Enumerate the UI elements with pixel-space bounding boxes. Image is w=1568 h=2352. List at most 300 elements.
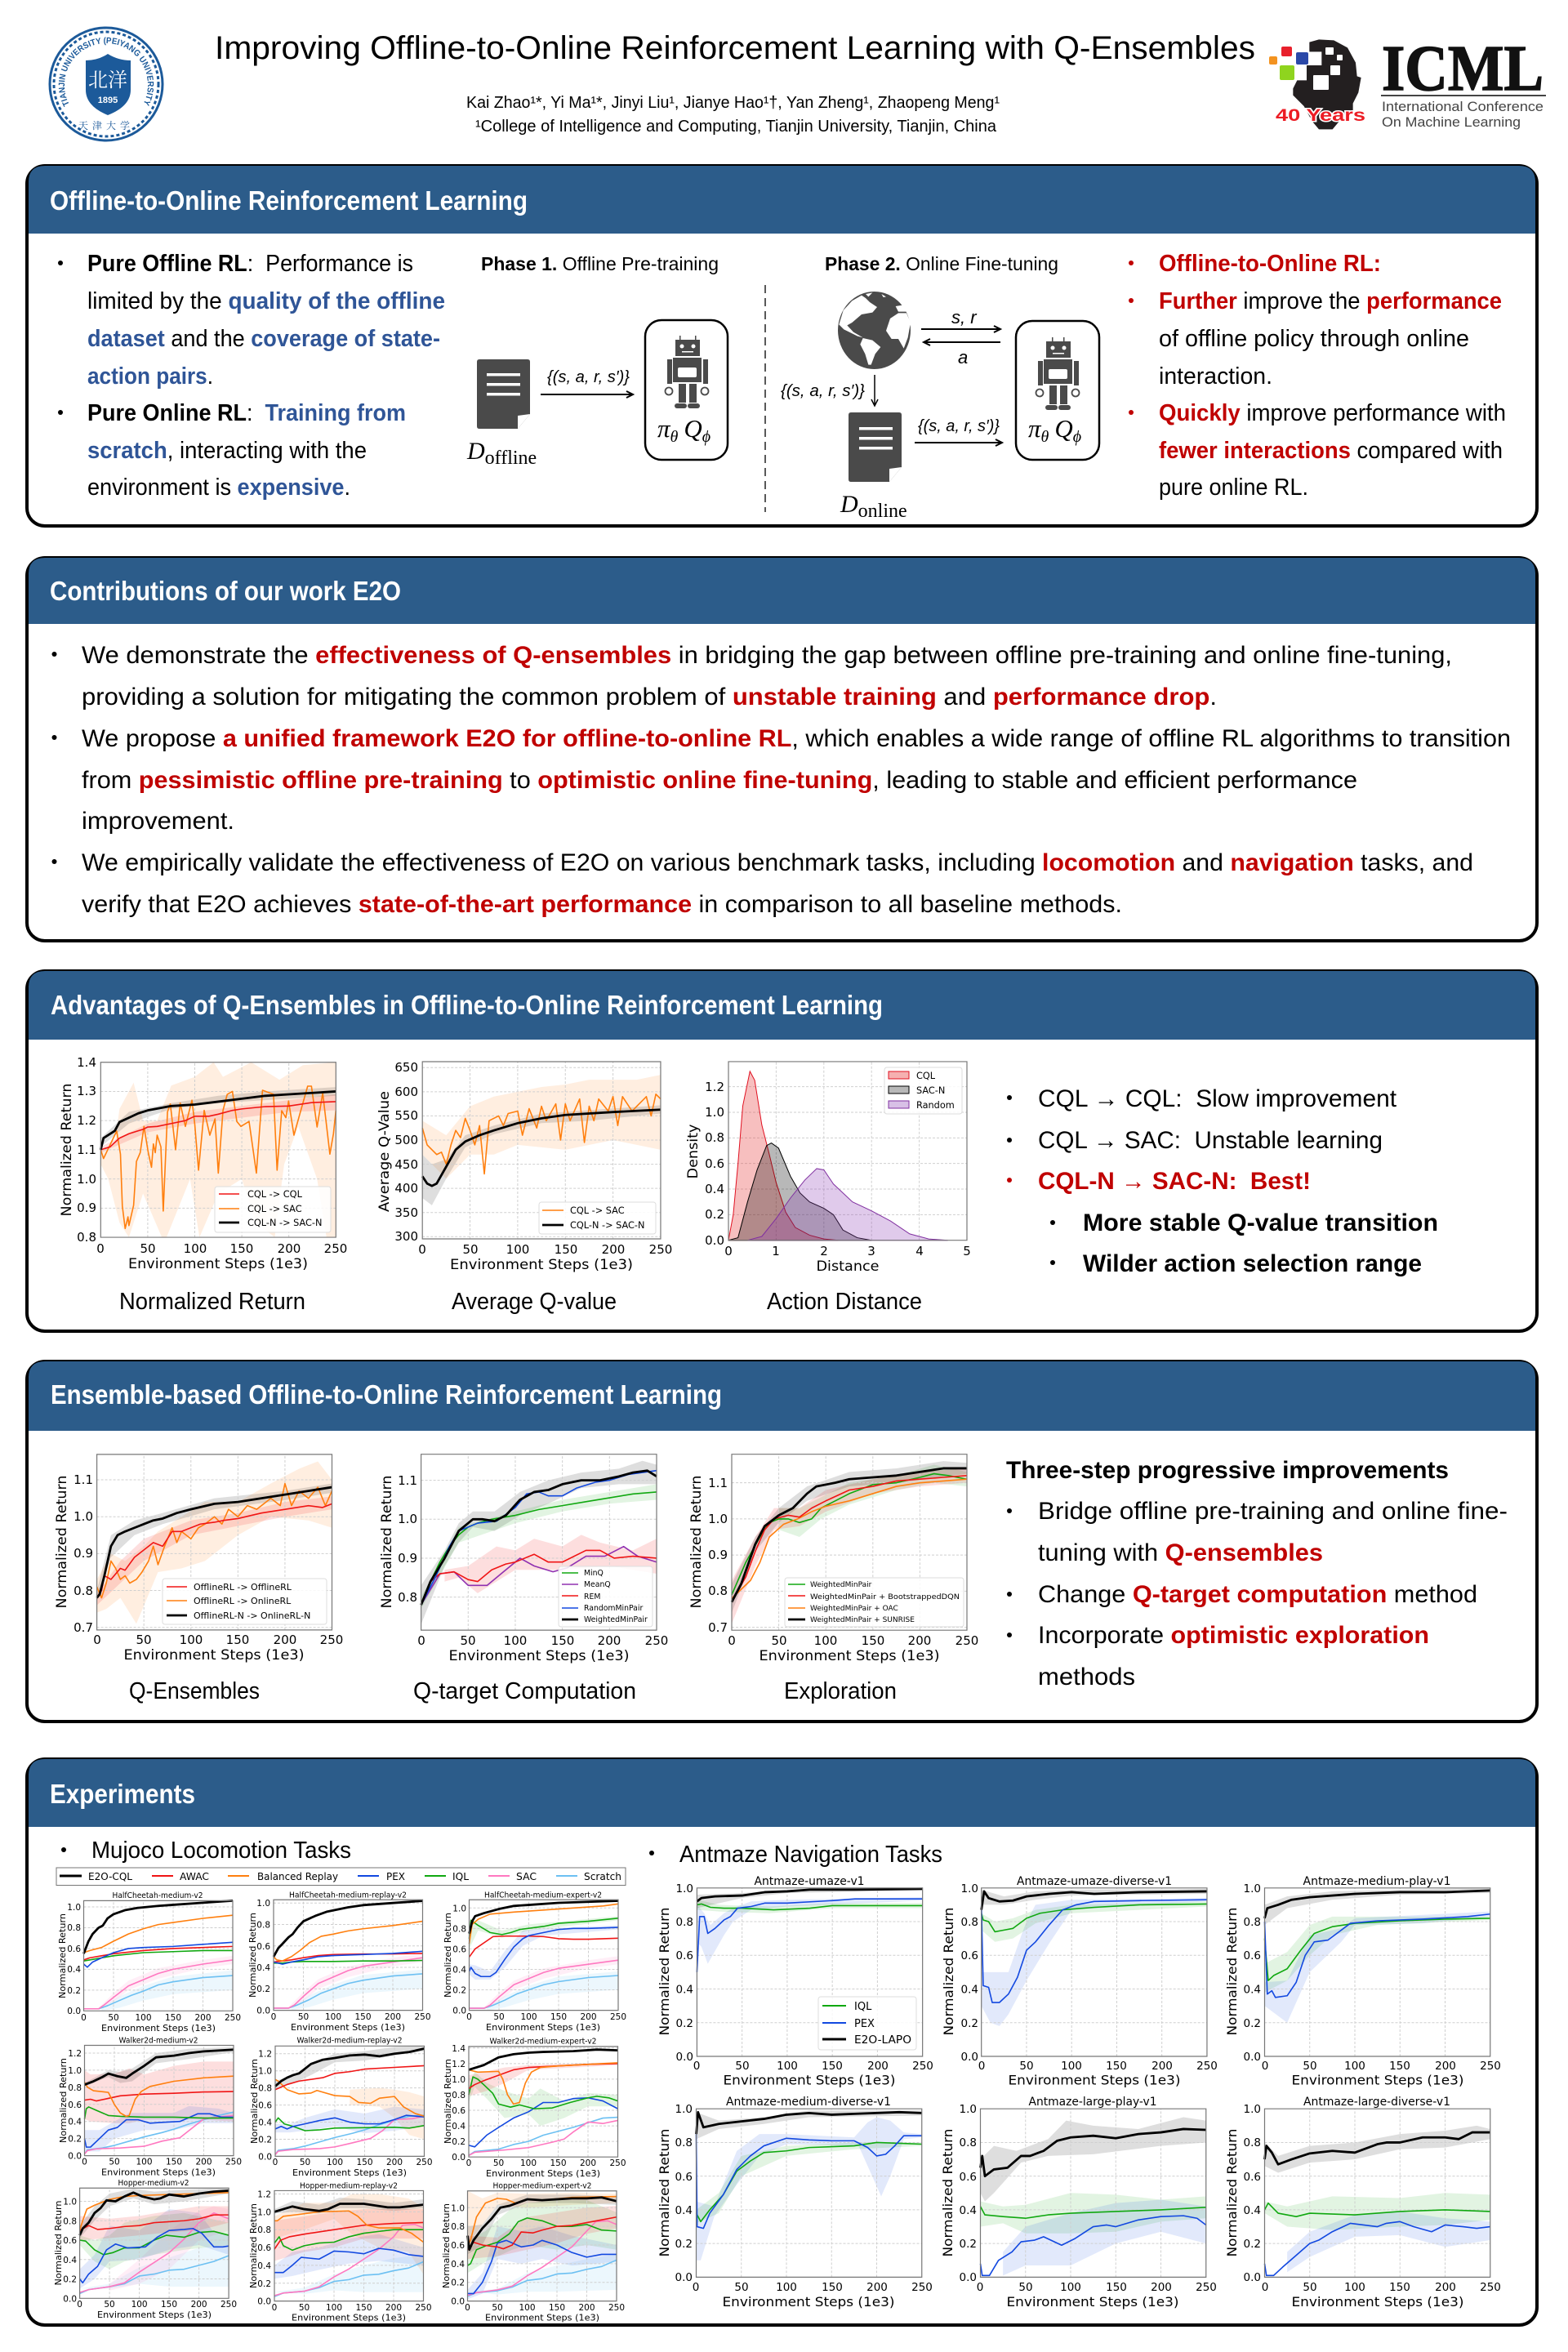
chart: Antmaze-umaze-diverse-v1: 150 [1106, 2060, 1127, 2073]
panel: experiments [27, 1759, 1537, 2325]
chart: Antmaze-medium-diverse-v1: 250 [911, 2281, 933, 2294]
chart: Walker2d-medium-replay-v2: 200 [386, 2158, 403, 2167]
chart: average Q-value: 100 [506, 1242, 529, 1257]
chart: Hopper-medium-replay-v2: 1.2 [257, 2190, 271, 2200]
diagram: phase 2 online fine-tuning [781, 253, 1099, 522]
chart: Hopper-medium-replay-v2: 0.0 [257, 2297, 271, 2307]
chart: action distance: 0.2 [705, 1207, 724, 1222]
chart: normalized return: 250 [324, 1241, 347, 1256]
icon: robot agent: θ [1041, 428, 1049, 446]
chart: Antmaze-umaze-diverse-v1: 0.8 [961, 1916, 978, 1929]
chart: Antmaze-medium-play-v1: 150 [1389, 2060, 1410, 2073]
chart: action distance: 4 [915, 1244, 924, 1258]
chart: Walker2d-medium-expert-v2: 0.2 [452, 2137, 466, 2147]
chart: Antmaze-umaze-v1: 50 [735, 2060, 750, 2073]
chart: HalfCheetah-medium-replay-v2 [247, 1891, 431, 2033]
chart: normalized return: 150 [230, 1241, 253, 1256]
chart: Antmaze-large-diverse-v1: 250 [1480, 2281, 1501, 2294]
icon: robot agent [645, 320, 728, 460]
chart: Q-ensembles: 50 [136, 1633, 152, 1647]
chart: Antmaze-umaze-v1: 250 [912, 2060, 933, 2073]
chart: HalfCheetah-medium-expert-v2 [443, 1891, 626, 2033]
chart: exploration: Normalized Return [688, 1475, 705, 1609]
heading [29, 1361, 1535, 1431]
chart: Antmaze-medium-play-v1: 0.2 [1244, 2017, 1261, 2030]
chart: Antmaze-large-play-v1: 0 [977, 2281, 983, 2294]
chart: exploration: 250 [956, 1633, 978, 1648]
chart: average Q-value: 500 [394, 1133, 418, 1147]
icon: robot agent: Q [684, 414, 702, 443]
chart: HalfCheetah-medium-replay-v2: 250 [414, 2012, 431, 2022]
chart: HalfCheetah-medium-v2: 0.8 [67, 1923, 81, 1933]
legend: Mujoco charts: E2O-CQL [88, 1871, 132, 1882]
chart: Antmaze-medium-play-v1: 0.8 [1244, 1916, 1261, 1929]
text block: contributions list: from pessimistic offline pre-training to optimistic online fine-tuning , leading to stable and efficient performance [82, 767, 1357, 794]
chart: Walker2d-medium-v2 [58, 2037, 242, 2177]
chart: Hopper-medium-expert-v2: 50 [492, 2303, 503, 2313]
chart: Hopper-medium-v2: 0.8 [63, 2216, 77, 2226]
text block: three-step improvements [1006, 1457, 1508, 1690]
logo: Tianjin University seal: 1895 [98, 96, 118, 105]
chart: Antmaze-large-diverse-v1: 200 [1435, 2281, 1456, 2294]
chart legend [163, 1579, 327, 1624]
subheading: Mujoco locomotion tasks: Mujoco Locomotion Tasks [91, 1838, 351, 1864]
chart: Hopper-medium-expert-v2: 0.6 [451, 2241, 465, 2251]
chart legend: WeightedMinPair + BootstrappedDQN [810, 1593, 960, 1601]
chart: exploration: 150 [862, 1633, 884, 1648]
chart: Walker2d-medium-expert-v2: Normalized Return [443, 2059, 453, 2144]
chart: Q-ensembles: 0 [93, 1633, 101, 1647]
text block: three-step improvements: Three-step progressive improvements [1006, 1457, 1449, 1484]
chart: Hopper-medium-expert-v2: 0 [465, 2303, 470, 2313]
chart: Hopper-medium-replay-v2: Hopper-medium-replay-v2 [300, 2182, 398, 2190]
chart: Walker2d-medium-v2: 0.8 [68, 2083, 82, 2093]
panel: offline-to-online RL [27, 166, 1537, 526]
chart: HalfCheetah-medium-expert-v2: 250 [610, 2012, 626, 2022]
chart: normalized return: 1.0 [77, 1172, 96, 1187]
chart: Hopper-medium-replay-v2: 1.0 [257, 2207, 271, 2217]
chart: HalfCheetah-medium-replay-v2: 150 [354, 2012, 372, 2022]
chart: Walker2d-medium-v2: 100 [136, 2158, 153, 2167]
chart: Antmaze-large-diverse-v1: 0.0 [1244, 2271, 1261, 2284]
icon: robot agent: θ [670, 428, 679, 446]
chart: HalfCheetah-medium-v2: 1.0 [67, 1903, 81, 1913]
chart: Antmaze-large-play-v1: Environment Steps (1e3) [1006, 2294, 1179, 2310]
chart: Walker2d-medium-expert-v2 [443, 2037, 626, 2179]
chart: Antmaze-umaze-diverse-v1: 200 [1152, 2060, 1173, 2073]
chart: Hopper-medium-expert-v2: 250 [608, 2303, 625, 2313]
chart: Q-target computation: 0.9 [398, 1551, 417, 1566]
chart: HalfCheetah-medium-expert-v2: 1.0 [452, 1904, 466, 1913]
legend: Mujoco charts: SAC [516, 1871, 537, 1882]
chart: HalfCheetah-medium-v2: 50 [108, 2013, 119, 2023]
chart: Antmaze-umaze-diverse-v1: 50 [1019, 2060, 1034, 2073]
chart: Antmaze-large-play-v1: 1.0 [960, 2103, 977, 2116]
chart: HalfCheetah-medium-expert-v2: 0.8 [452, 1924, 466, 1934]
chart: Antmaze-large-play-v1: Antmaze-large-play-v1 [1029, 2096, 1156, 2109]
logo: ICML 40 years: 40 Years [1276, 106, 1365, 125]
chart: HalfCheetah-medium-expert-v2: 0.6 [452, 1944, 466, 1954]
chart: average Q-value: 150 [555, 1242, 577, 1257]
subheading: Antmaze navigation tasks: Antmaze Navigation Tasks [679, 1842, 942, 1868]
text block: offline-to-online RL benefits [1129, 251, 1506, 501]
chart: normalized return: Environment Steps (1e3) [128, 1256, 308, 1272]
chart: Antmaze-large-play-v1: 0.4 [960, 2204, 977, 2217]
chart: Q-target computation [379, 1454, 668, 1664]
chart: normalized return: 200 [278, 1241, 301, 1256]
chart: Hopper-medium-replay-v2: Environment Steps (1e3) [292, 2313, 406, 2323]
chart: Hopper-medium-expert-v2: Hopper-medium-expert-v2 [493, 2182, 591, 2190]
chart: Antmaze-umaze-v1: 1.0 [676, 1882, 693, 1895]
chart: normalized return: 0.9 [77, 1200, 96, 1215]
text block: algorithm comparison: More stable Q-value transition [1083, 1209, 1438, 1236]
chart: Hopper-medium-replay-v2: 100 [326, 2303, 342, 2313]
chart: Antmaze-medium-diverse-v1: 0.2 [675, 2238, 693, 2251]
chart: HalfCheetah-medium-v2: 100 [135, 2013, 152, 2023]
chart: normalized return: 1.2 [77, 1113, 96, 1128]
text block: algorithm comparison: Wilder action selection range [1083, 1250, 1422, 1277]
chart: Antmaze-medium-play-v1: 0.0 [1244, 2051, 1261, 2064]
chart: action distance: Distance [817, 1258, 879, 1275]
chart: Hopper-medium-v2: 0.2 [63, 2275, 77, 2285]
chart: Antmaze-medium-play-v1: 50 [1303, 2060, 1317, 2073]
chart: Q-ensembles: 100 [180, 1633, 203, 1647]
chart: Walker2d-medium-replay-v2: Environment Steps (1e3) [292, 2167, 407, 2178]
chart: Antmaze-medium-play-v1: 250 [1480, 2060, 1501, 2073]
chart: Hopper-medium-v2: Normalized Return [53, 2200, 64, 2285]
diagram: phase 2 online fine-tuning: a [958, 347, 968, 368]
chart legend: PEX [854, 2018, 875, 2030]
chart: Walker2d-medium-expert-v2: 0.8 [452, 2091, 466, 2100]
chart: Hopper-medium-v2: 0 [77, 2300, 82, 2310]
chart: Antmaze-medium-diverse-v1: 0.4 [675, 2204, 693, 2217]
diagram: phase 2 online fine-tuning: {(s, a, r, s′)} [918, 417, 1000, 435]
text block: offline and online RL: scratch, interacting with the [87, 438, 367, 464]
chart: action distance: 1.2 [705, 1080, 724, 1094]
chart legend: OfflineRL -> OnlineRL [194, 1596, 292, 1606]
heading [29, 1759, 1535, 1827]
chart: Antmaze-medium-diverse-v1 [657, 2096, 933, 2310]
chart: Antmaze-umaze-v1: Normalized Return [657, 1908, 672, 2035]
icon: offline dataset document [477, 359, 530, 429]
chart: Antmaze-medium-play-v1: 200 [1435, 2060, 1456, 2073]
chart: Walker2d-medium-replay-v2: 50 [300, 2158, 310, 2167]
chart: Antmaze-umaze-diverse-v1: 0.0 [961, 2051, 978, 2064]
chart: Hopper-medium-expert-v2: 100 [519, 2303, 536, 2313]
chart legend: CQL-N -> SAC-N [247, 1218, 322, 1228]
heading: Offline-to-Online Reinforcement Learning [50, 185, 528, 216]
chart: Q-ensembles: 1.0 [74, 1509, 93, 1524]
text block: offline and online RL: limited by the quality of the offline [87, 288, 445, 314]
text block: algorithm comparison: CQL → CQL: Slow improvement [1038, 1085, 1397, 1112]
chart: Antmaze-large-diverse-v1: 0.6 [1244, 2171, 1261, 2184]
chart: Antmaze-umaze-diverse-v1: Normalized Return [941, 1908, 956, 2035]
text block: offline-to-online RL benefits: Quickly improve performance with [1159, 400, 1506, 426]
chart: Antmaze-medium-diverse-v1: 1.0 [675, 2103, 693, 2116]
chart legend: SAC-N [916, 1085, 945, 1096]
chart: HalfCheetah-medium-v2: 150 [165, 2013, 181, 2023]
logo: Tianjin University seal [49, 26, 163, 142]
text block: contributions list: improvement. [82, 808, 234, 835]
text block: offline-to-online RL benefits: Further improve the performance [1159, 288, 1502, 314]
chart: Antmaze-large-diverse-v1: Antmaze-large-diverse-v1 [1303, 2096, 1450, 2109]
legend: Mujoco charts: Scratch [584, 1871, 621, 1882]
chart: HalfCheetah-medium-v2: 0 [81, 2013, 87, 2023]
chart: HalfCheetah-medium-replay-v2: 0 [271, 2012, 276, 2022]
chart: exploration: 0.9 [708, 1548, 728, 1562]
chart: Antmaze-large-play-v1: 250 [1196, 2281, 1217, 2294]
chart legend: OfflineRL -> OfflineRL [194, 1582, 292, 1592]
chart: HalfCheetah-medium-replay-v2: 0.2 [256, 1984, 270, 1994]
diagram: phase 2 online fine-tuning: s, r [951, 307, 978, 327]
chart: exploration: 1.0 [708, 1512, 728, 1526]
chart: exploration: 200 [908, 1633, 931, 1648]
chart: HalfCheetah-medium-v2: 0.2 [67, 1986, 81, 1996]
chart: Walker2d-medium-expert-v2: 0.0 [452, 2153, 466, 2163]
chart: HalfCheetah-medium-replay-v2: 0.0 [256, 2007, 270, 2016]
chart: normalized return: 1.1 [77, 1143, 96, 1157]
chart: Antmaze-medium-play-v1: 0 [1262, 2060, 1268, 2073]
chart: Antmaze-umaze-v1: Environment Steps (1e3) [724, 2073, 895, 2087]
chart: Q-ensembles [54, 1454, 343, 1664]
chart: Antmaze-medium-diverse-v1: 50 [734, 2281, 749, 2294]
chart: Walker2d-medium-v2: Environment Steps (1e3) [101, 2167, 216, 2177]
heading: Advantages of Q-Ensembles in Offline-to-Online Reinforcement Learning [51, 990, 883, 1020]
diagram: phase 1 offline pre-training: Phase 1. Offline Pre-training [481, 253, 719, 274]
chart: Q-ensembles: 0.8 [74, 1584, 93, 1598]
chart: Hopper-medium-expert-v2: 1.0 [451, 2203, 465, 2213]
chart: HalfCheetah-medium-expert-v2: Environment Steps (1e3) [486, 2022, 600, 2033]
text block: offline and online RL: action pairs. [87, 363, 213, 390]
chart: Walker2d-medium-replay-v2: 0.6 [258, 2101, 272, 2111]
chart: Walker2d-medium-expert-v2: 50 [493, 2158, 504, 2168]
chart: Antmaze-large-diverse-v1: 100 [1344, 2281, 1365, 2294]
chart: Hopper-medium-expert-v2: 0.8 [451, 2222, 465, 2232]
caption: action distance: Action Distance [767, 1289, 922, 1315]
chart: action distance: 1.0 [705, 1105, 724, 1120]
chart legend: CQL -> SAC [570, 1205, 625, 1216]
chart: Walker2d-medium-replay-v2: 1.2 [258, 2050, 272, 2060]
chart: Antmaze-large-play-v1: 0.0 [960, 2271, 977, 2284]
chart: average Q-value: 550 [394, 1108, 418, 1123]
chart legend: WeightedMinPair [584, 1615, 648, 1624]
chart: Walker2d-medium-expert-v2: 200 [580, 2158, 596, 2168]
text block: offline and online RL: environment is expensive. [87, 474, 350, 501]
chart: Q-target computation: 100 [504, 1633, 527, 1648]
chart: average Q-value [376, 1060, 672, 1273]
text block: offline and online RL: Pure Online RL: Training from [87, 400, 406, 426]
chart: HalfCheetah-medium-expert-v2: Normalized Return [443, 1913, 453, 1998]
chart: normalized return: 1.3 [77, 1084, 96, 1098]
chart: Walker2d-medium-v2: 1.0 [68, 2066, 82, 2076]
logo: Tianjin University seal: 天津大学 [78, 119, 134, 131]
chart: action distance: 0 [724, 1244, 733, 1258]
title: Improving Offline-to-Online Reinforcement Learning with Q-Ensembles [215, 30, 1255, 66]
chart: Q-target computation: 1.1 [398, 1473, 417, 1488]
chart: Antmaze-umaze-v1: 200 [867, 2060, 889, 2073]
chart: Antmaze-umaze-v1: 0.0 [676, 2051, 693, 2064]
chart: Walker2d-medium-replay-v2: 1.0 [258, 2067, 272, 2077]
chart: Walker2d-medium-replay-v2: 100 [327, 2158, 343, 2167]
diagram: phase 2 online fine-tuning: {(s, a, r, s′)} [781, 382, 865, 400]
chart: Hopper-medium-replay-v2: 250 [415, 2303, 432, 2313]
chart: Antmaze-medium-diverse-v1: Normalized Return [657, 2128, 672, 2257]
chart: average Q-value: 300 [394, 1229, 418, 1244]
chart: HalfCheetah-medium-replay-v2: 0.4 [256, 1963, 270, 1973]
chart: Walker2d-medium-expert-v2: 1.4 [452, 2044, 466, 2054]
text block: contributions list: providing a solution for mitigating the common problem of unstable training and performance drop . [82, 684, 1217, 710]
chart legend: RandomMinPair [584, 1604, 643, 1613]
chart legend: CQL-N -> SAC-N [570, 1220, 644, 1231]
logo: ICML 40 years [1269, 33, 1546, 130]
chart: Walker2d-medium-expert-v2: Walker2d-medium-expert-v2 [490, 2037, 596, 2047]
caption: exploration: Exploration [784, 1678, 897, 1704]
chart: action distance: 0.8 [705, 1130, 724, 1145]
chart: Antmaze-umaze-diverse-v1: 0.6 [961, 1949, 978, 1962]
chart: Q-ensembles: 0.9 [74, 1546, 93, 1561]
chart: Q-target computation: 1.0 [398, 1512, 417, 1526]
chart legend: OfflineRL-N -> OnlineRL-N [194, 1610, 310, 1621]
chart: normalized return: 50 [140, 1241, 156, 1256]
caption: normalized return: Normalized Return [119, 1289, 305, 1315]
chart: normalized return: 1.4 [77, 1055, 96, 1070]
chart: Walker2d-medium-replay-v2: Walker2d-medium-replay-v2 [297, 2037, 402, 2045]
legend: Mujoco charts: AWAC [180, 1871, 209, 1882]
chart: Hopper-medium-v2: 0.4 [63, 2256, 77, 2265]
chart: Walker2d-medium-expert-v2: 0.6 [452, 2106, 466, 2116]
chart: Walker2d-medium-replay-v2: Normalized Return [249, 2059, 260, 2144]
chart: Hopper-medium-expert-v2 [441, 2182, 625, 2323]
chart: Antmaze-umaze-v1: 0.4 [676, 1983, 693, 1996]
chart: Antmaze-large-play-v1: 0.2 [960, 2238, 977, 2251]
chart: Antmaze-large-play-v1: 200 [1151, 2281, 1172, 2294]
chart: Hopper-medium-expert-v2: 0.0 [451, 2297, 465, 2307]
caption: Q-ensembles: Q-Ensembles [129, 1678, 260, 1704]
chart: HalfCheetah-medium-v2: 0.0 [67, 2007, 81, 2016]
chart: Antmaze-large-diverse-v1: 50 [1303, 2281, 1317, 2294]
chart: Hopper-medium-v2: 0.6 [63, 2236, 77, 2246]
chart: Hopper-medium-replay-v2: 0.4 [257, 2261, 271, 2271]
chart legend [215, 1187, 331, 1232]
chart: Walker2d-medium-replay-v2: 0.8 [258, 2084, 272, 2094]
affiliation: ¹College of Intelligence and Computing, Tianjin University, Tianjin, China [475, 118, 997, 136]
chart: Antmaze-medium-diverse-v1: 200 [866, 2281, 888, 2294]
caption: Q-target computation: Q-target Computation [413, 1678, 636, 1704]
chart: Antmaze-large-diverse-v1: Environment Steps (1e3) [1292, 2294, 1463, 2310]
chart: Antmaze-umaze-diverse-v1: 0.2 [961, 2017, 978, 2030]
chart: HalfCheetah-medium-replay-v2: HalfCheetah-medium-replay-v2 [289, 1891, 407, 1900]
chart: average Q-value: 400 [394, 1181, 418, 1196]
chart: Walker2d-medium-expert-v2: 0.4 [452, 2122, 466, 2132]
chart: Antmaze-medium-play-v1: 0.4 [1244, 1983, 1261, 1996]
chart: Walker2d-medium-v2: 0.4 [68, 2118, 82, 2127]
chart: Antmaze-large-diverse-v1: 0.4 [1244, 2204, 1261, 2217]
diagram: phase 2 online fine-tuning: online [858, 501, 907, 522]
chart: Antmaze-umaze-diverse-v1: 250 [1196, 2060, 1218, 2073]
chart legend: IQL [854, 2001, 872, 2013]
chart: Antmaze-medium-diverse-v1: 0.8 [675, 2136, 693, 2149]
chart: Walker2d-medium-expert-v2: 100 [520, 2158, 537, 2168]
chart: Walker2d-medium-v2: 150 [166, 2158, 182, 2167]
chart: Walker2d-medium-v2: 200 [195, 2158, 212, 2167]
chart: Antmaze-medium-play-v1: 1.0 [1244, 1882, 1261, 1895]
chart legend: E2O-LAPO [854, 2034, 911, 2047]
chart: Hopper-medium-v2: 0.0 [63, 2294, 77, 2304]
chart: average Q-value: 450 [394, 1157, 418, 1172]
icon: robot agent: π [657, 414, 670, 443]
chart: HalfCheetah-medium-v2: 250 [225, 2013, 241, 2023]
chart: Walker2d-medium-replay-v2: 150 [356, 2158, 373, 2167]
chart: Q-target computation: 250 [645, 1633, 668, 1648]
chart: Antmaze-large-diverse-v1: 0 [1262, 2281, 1268, 2294]
chart: Antmaze-umaze-v1: 0.8 [676, 1916, 693, 1929]
text block: algorithm comparison: CQL-N → SAC-N: Best! [1038, 1168, 1311, 1195]
chart: Hopper-medium-replay-v2: 0 [272, 2303, 277, 2313]
chart: Hopper-medium-expert-v2: 200 [578, 2303, 595, 2313]
legend: Mujoco charts: IQL [452, 1871, 469, 1882]
icon: globe [838, 292, 911, 369]
chart: Hopper-medium-replay-v2: 150 [355, 2303, 372, 2313]
chart legend: WeightedMinPair + SUNRISE [810, 1616, 915, 1624]
chart: HalfCheetah-medium-v2: 0.6 [67, 1944, 81, 1954]
chart: normalized return: 0.8 [77, 1230, 96, 1245]
chart: Antmaze-umaze-diverse-v1: 100 [1061, 2060, 1082, 2073]
icon: robot agent [1016, 321, 1099, 460]
icon: robot agent: Q [1054, 414, 1073, 443]
chart: normalized return: 0 [96, 1241, 105, 1256]
chart: Q-ensembles: 150 [226, 1633, 249, 1647]
chart: HalfCheetah-medium-replay-v2: Environment Steps (1e3) [291, 2022, 405, 2033]
chart: HalfCheetah-medium-expert-v2: 0 [466, 2012, 472, 2022]
chart: average Q-value: 600 [394, 1085, 418, 1099]
diagram: phase 1 offline pre-training: offline [485, 448, 537, 469]
chart: action distance: 1 [772, 1244, 780, 1258]
chart: Antmaze-medium-diverse-v1: 0.6 [675, 2171, 693, 2184]
chart: exploration [688, 1454, 978, 1664]
chart legend [818, 1997, 916, 2050]
chart: Q-ensembles: 250 [320, 1633, 343, 1647]
chart: Hopper-medium-replay-v2: 0.2 [257, 2279, 271, 2289]
chart: Hopper-medium-v2: Hopper-medium-v2 [118, 2179, 189, 2188]
arrow [541, 391, 633, 398]
chart legend: REM [584, 1592, 600, 1601]
panel: advantages of Q-ensembles [27, 971, 1537, 1331]
chart legend: MinQ [584, 1569, 604, 1578]
chart: HalfCheetah-medium-expert-v2: 0.2 [452, 1986, 466, 1996]
legend: Mujoco charts: Balanced Replay [257, 1871, 338, 1882]
text block: three-step improvements: tuning with Q-ensembles [1038, 1539, 1323, 1566]
chart: Antmaze-medium-play-v1: Antmaze-medium-play-v1 [1303, 1875, 1450, 1888]
diagram: phase 1 offline pre-training [466, 253, 728, 469]
chart: action distance: 0.4 [705, 1182, 724, 1196]
panel: contributions [27, 558, 1537, 941]
chart legend: MeanQ [584, 1580, 611, 1589]
heading: Ensemble-based Offline-to-Online Reinforcement Learning [51, 1379, 722, 1410]
chart: Walker2d-medium-replay-v2: 0.0 [258, 2152, 272, 2162]
chart: HalfCheetah-medium-replay-v2: 0.8 [256, 1921, 270, 1931]
logo: ICML 40 years: International Conference [1382, 99, 1544, 114]
chart: HalfCheetah-medium-v2: Environment Steps (1e3) [101, 2023, 216, 2034]
text block: algorithm comparison [1007, 1085, 1438, 1277]
chart legend: CQL -> CQL [247, 1189, 303, 1200]
chart: normalized return [59, 1055, 347, 1272]
chart: Antmaze-large-play-v1: Normalized Return [940, 2128, 956, 2257]
chart: Walker2d-medium-replay-v2: 0.4 [258, 2118, 272, 2128]
chart: average Q-value: 350 [394, 1205, 418, 1220]
chart: HalfCheetah-medium-expert-v2: 50 [493, 2012, 505, 2022]
chart: Walker2d-medium-expert-v2: 1.0 [452, 2075, 466, 2085]
chart: Walker2d-medium-replay-v2: 0 [273, 2158, 278, 2167]
